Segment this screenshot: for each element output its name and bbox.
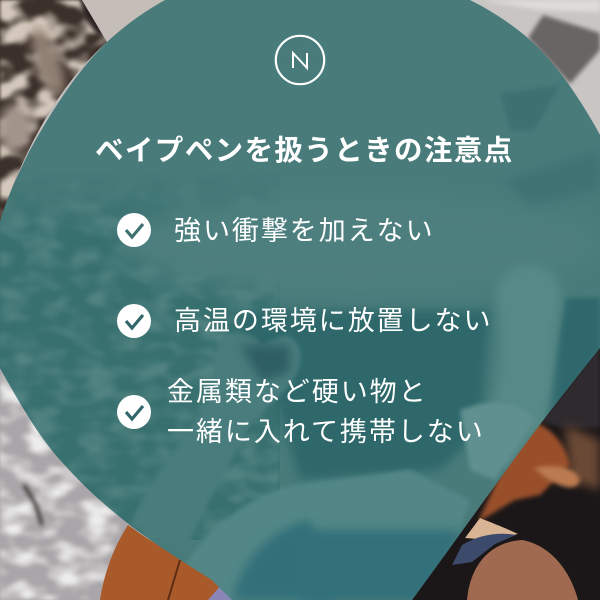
icon: check 1 [117,213,151,247]
photo: top right rock [460,0,600,140]
photo: head, hair and shoulder [400,340,600,600]
item 2 [117,304,492,338]
text: item 3: 金属類など硬い物と [167,377,428,407]
panel texture: central smoke haze [128,202,280,289]
logo [276,36,324,84]
torso silhouette [185,470,470,600]
photo: leg [100,525,240,600]
photo: dark rocky area top left [0,0,110,225]
photo: pale stone top [82,0,170,42]
icon: check 3 [117,395,151,429]
photo: pale rock lower left [0,365,235,600]
panel texture: dappled reflections left [0,170,280,540]
text: item 2: 高温の環境に放置しない [174,306,492,336]
text: item 3: 一緒に入れて携帯しない [167,417,485,447]
item 3 [117,377,485,447]
icon: check 2 [117,304,151,338]
title: ベイプペンを扱うときの注意点 [95,135,514,167]
smoke plume [496,268,564,468]
panel texture: shaded wall [230,310,490,480]
arm and hand silhouette [130,333,301,552]
item 1 [117,213,435,247]
text: item 1: 強い衝撃を加えない [174,216,435,246]
